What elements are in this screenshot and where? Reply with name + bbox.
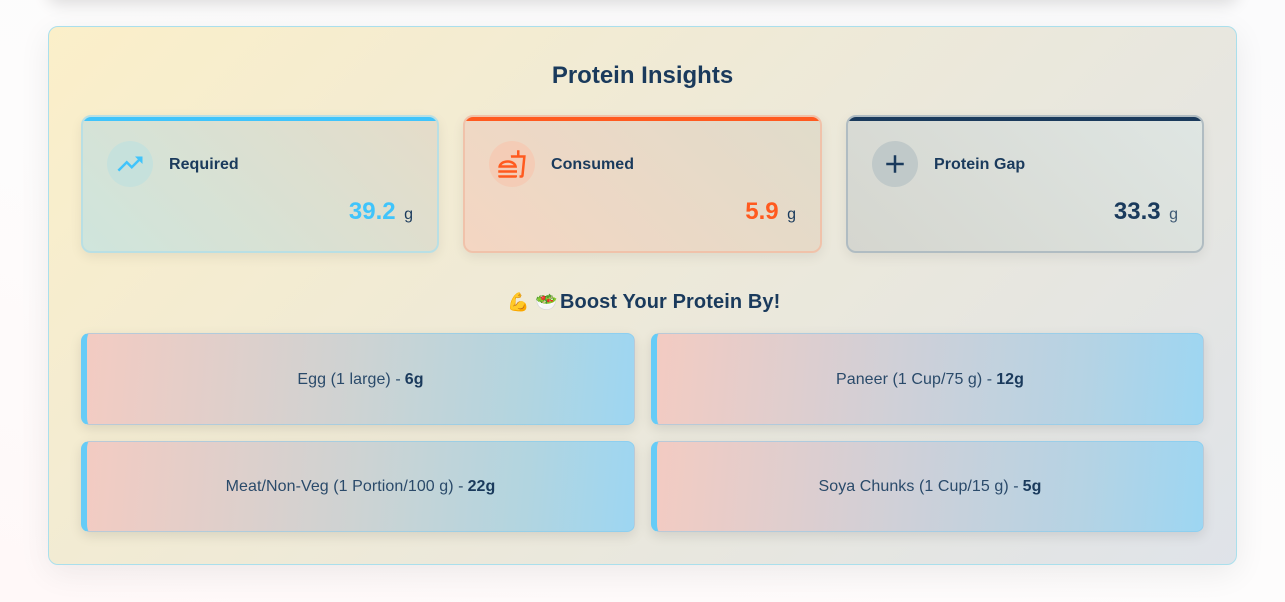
item: egg — [81, 333, 635, 425]
label: required: Required — [169, 156, 239, 173]
card: consumed — [463, 115, 822, 253]
subheading: 💪 — [507, 292, 529, 312]
item: soya chunks: 5g — [1023, 478, 1041, 495]
icon: fastfood — [489, 141, 535, 187]
title: Protein Insights — [552, 62, 733, 89]
item: paneer: 12g — [996, 370, 1024, 388]
label: protein gap: Protein Gap — [934, 156, 1025, 173]
subheading: 🥗 — [535, 292, 557, 312]
item: paneer: Paneer (1 Cup/75 g) - — [836, 370, 992, 388]
card: required — [81, 115, 439, 253]
item: egg: 6g — [405, 370, 424, 388]
value: required: 39.2 g — [349, 198, 413, 225]
value: protein gap: 33.3 g — [1114, 198, 1178, 225]
accent bar: required — [81, 117, 439, 121]
item: meat: Meat/Non-Veg (1 Portion/100 g) - — [226, 478, 464, 495]
card: protein gap — [846, 115, 1204, 253]
item: soya chunks: Soya Chunks (1 Cup/15 g) - — [819, 478, 1019, 495]
icon: plus — [872, 141, 918, 187]
item: meat — [81, 441, 635, 532]
accent bar: protein gap — [846, 117, 1204, 121]
item: egg: Egg (1 large) - — [297, 370, 401, 388]
label: consumed: Consumed — [551, 156, 634, 173]
subheading: Boost Your Protein By! — [560, 291, 780, 313]
item: paneer — [651, 333, 1204, 425]
icon: trending up — [107, 141, 153, 187]
item: soya chunks — [651, 441, 1204, 532]
accent bar: consumed — [463, 117, 822, 121]
item: meat: 22g — [468, 478, 495, 495]
value: consumed: 5.9 g — [745, 198, 796, 225]
